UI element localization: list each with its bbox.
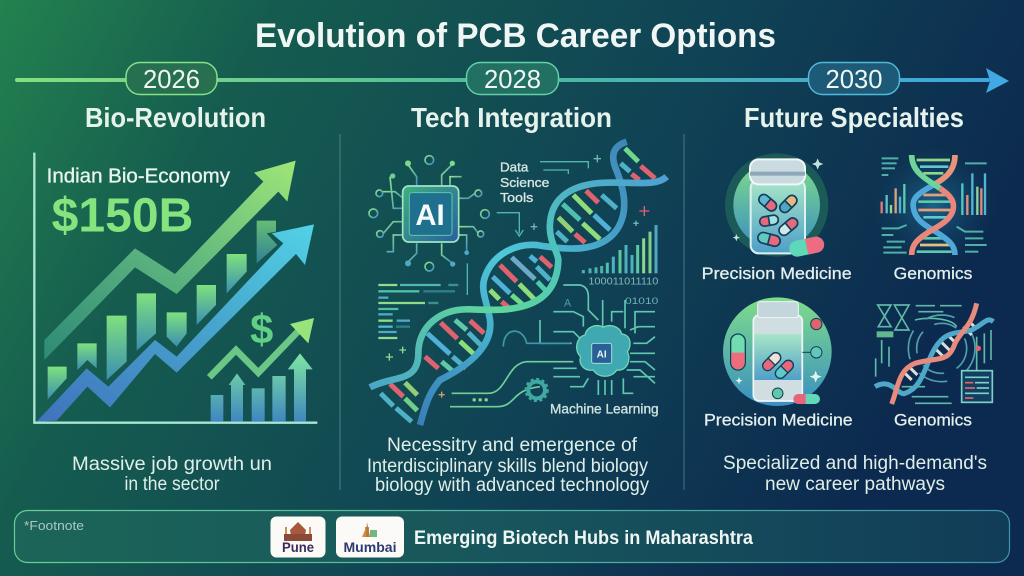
footnote: *Footnote xyxy=(24,518,84,533)
caption: Tech Integration: Necessitry and emergence of xyxy=(387,435,638,456)
heading: Tech Integration: Tech Integration xyxy=(411,102,612,133)
footer panel xyxy=(14,510,1010,562)
label: Precision Medicine second: Precision Medicine xyxy=(704,411,853,430)
year 2026 xyxy=(126,62,217,94)
icon: Mumbai skyline xyxy=(362,522,377,537)
caption: Bio-Revolution xyxy=(72,454,272,495)
label: Data Science Tools: Data xyxy=(500,160,529,175)
DNA rungs xyxy=(381,148,655,422)
icon: precision medicine bottle xyxy=(723,297,832,406)
chart bars xyxy=(48,221,277,399)
DNA double helix xyxy=(370,142,667,425)
DNA strand 2 xyxy=(420,142,627,425)
year 2030 xyxy=(808,62,900,94)
extra binary: 01010 xyxy=(625,296,658,306)
green growth arrow xyxy=(44,161,296,360)
AI chip label: AI xyxy=(415,199,445,232)
year 2028: 2028 xyxy=(484,64,541,94)
caption: Tech Integration: Interdisciplinary skills blend biology xyxy=(367,456,648,477)
pills in jar xyxy=(757,192,800,247)
AI chip icon xyxy=(369,156,489,271)
machine learning brain icon xyxy=(450,285,655,407)
DNA strand 1 xyxy=(370,177,667,387)
letter A: A xyxy=(564,298,572,310)
code lines xyxy=(378,285,458,338)
small bars xyxy=(211,353,313,422)
label: Data Science Tools: Science xyxy=(500,175,549,190)
card: Mumbai: Mumbai xyxy=(344,539,396,555)
specialties illustrations xyxy=(702,147,997,430)
year 2030: 2030 xyxy=(826,64,882,94)
chart axes xyxy=(34,153,317,423)
caption: Tech Integration: biology with advanced technology xyxy=(375,475,649,496)
dots xyxy=(473,398,488,401)
card: Mumbai xyxy=(336,516,404,558)
small dollar sign: $ xyxy=(250,305,273,352)
year 2026: 2026 xyxy=(143,64,200,94)
bar chart with binary xyxy=(583,225,659,288)
card: Pune: Pune xyxy=(282,539,314,555)
sparkles xyxy=(386,155,649,398)
binary digits: 100011011110 xyxy=(588,277,659,288)
data science connector xyxy=(467,162,588,295)
caption: Future Specialties: Specialized and high-demand's xyxy=(723,453,987,474)
heading: Bio-Revolution: Bio-Revolution xyxy=(85,102,266,133)
caption: Bio-Revolution: Massive job growth un xyxy=(72,454,272,475)
label: Genomics second: Genomics xyxy=(894,411,972,430)
timeline xyxy=(15,62,1009,94)
label: Data Science Tools: Tools xyxy=(500,190,534,205)
year 2028 xyxy=(466,62,558,94)
label: Genomics: Genomics xyxy=(894,264,972,283)
value: $150B: $150B xyxy=(52,189,193,243)
icon: Pune temple xyxy=(284,522,312,541)
blue growth arrow xyxy=(37,224,314,422)
label: Data Science Tools xyxy=(500,160,549,205)
caption: Bio-Revolution: in the sector xyxy=(124,474,220,495)
icon: genomics helix with charts xyxy=(870,147,997,263)
footer heading: Emerging Biotech Hubs in Maharashtra xyxy=(414,528,753,549)
card: Pune xyxy=(270,516,326,558)
brain chip label: AI xyxy=(597,349,607,360)
growth chart xyxy=(34,153,317,423)
icon: genomics ribbon with data xyxy=(875,303,993,404)
small growth arrow xyxy=(209,318,314,377)
label: Machine Learning: Machine Learning xyxy=(550,401,659,417)
label: Precision Medicine: Precision Medicine xyxy=(702,264,852,283)
icon: precision medicine jar xyxy=(725,153,828,258)
caption: Future Specialties xyxy=(723,453,987,495)
label: Indian Bio-Economy: Indian Bio-Economy xyxy=(47,166,230,188)
gear icon xyxy=(526,379,548,401)
timeline arrowhead xyxy=(986,68,1009,93)
caption: Tech Integration xyxy=(367,435,649,496)
caption: Future Specialties: new career pathways xyxy=(765,474,945,495)
title: Evolution of PCB Career Options xyxy=(255,17,776,55)
tech illustration xyxy=(369,142,667,425)
heading: Future Specialties: Future Specialties xyxy=(744,102,964,133)
